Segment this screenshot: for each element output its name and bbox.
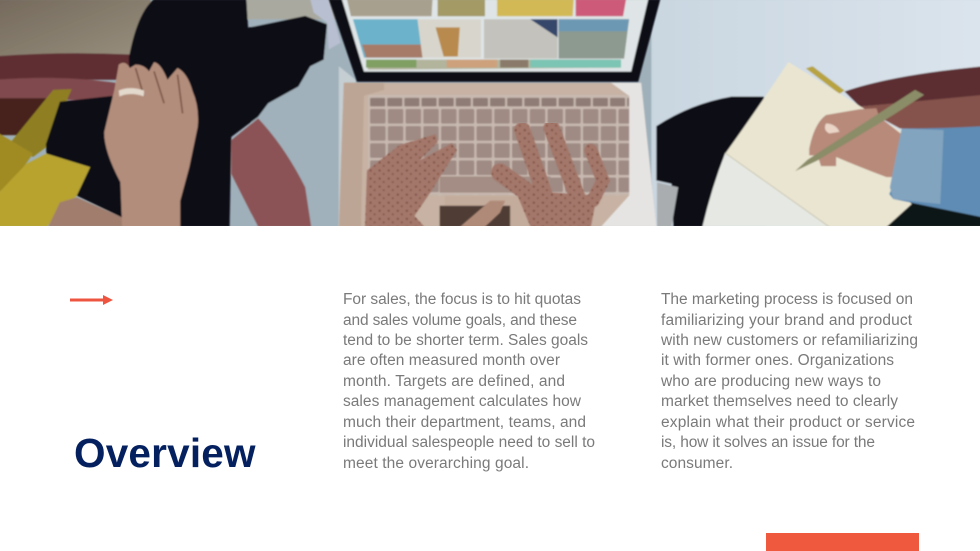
right typing hand	[500, 128, 603, 227]
text block: marketing process: market themselves need to clearly	[661, 393, 898, 410]
photo contents, nudged so soft edges fall outside the frame	[0, 0, 980, 228]
text block: sales goals: For sales, the focus is to hit quotas	[343, 291, 581, 308]
black knee	[656, 97, 766, 227]
text block: marketing process: familiarizing your brand and product	[661, 312, 913, 329]
yellow sweater	[10, 89, 72, 157]
pen	[795, 90, 924, 171]
text block: sales goals: meet the overarching goal.	[343, 455, 529, 472]
text block: marketing process: explain what their product or service	[661, 414, 915, 431]
title: Overview: Overview	[74, 430, 256, 476]
text block: marketing process	[661, 291, 918, 472]
black lap	[886, 194, 980, 227]
typing hands	[365, 128, 603, 227]
red armchair	[0, 53, 130, 80]
denim sleeve	[889, 126, 980, 217]
text block: sales goals	[343, 291, 595, 472]
left typing hand	[365, 134, 505, 227]
text block: sales goals: sales management calculates how	[343, 393, 582, 410]
text block: marketing process: is, how it solves an issue for the	[661, 434, 875, 451]
text block: marketing process: consumer.	[661, 455, 733, 472]
left part of the photo	[0, 0, 356, 228]
writing hand	[809, 108, 903, 177]
pink sleeve	[844, 66, 980, 107]
text block: marketing process: The marketing process is focused on	[661, 291, 913, 308]
text block: sales goals: month. Targets are defined, and	[343, 373, 565, 390]
orange accent block	[766, 533, 919, 551]
text block: sales goals: much their department, teams, and	[343, 414, 586, 431]
hand with ring	[104, 62, 198, 227]
screen gallery tiles	[347, 0, 629, 70]
text block: sales goals: individual salespeople need to sell to	[343, 434, 595, 451]
text block: marketing process: who are producing new ways to	[661, 373, 881, 390]
notebook	[702, 62, 912, 227]
arrow icon	[70, 295, 113, 305]
header photo: people working around a laptop	[0, 0, 980, 226]
laptop screen	[329, 0, 660, 82]
right part of the photo	[651, 0, 980, 227]
text block: sales goals: and sales volume goals, and these	[343, 312, 577, 329]
laptop	[329, 0, 660, 227]
text block: sales goals: tend to be shorter term. Sales goals	[343, 332, 588, 349]
text block: sales goals: are often measured month over	[343, 352, 560, 369]
text block: marketing process: it with former ones. Organizations	[661, 352, 894, 369]
laptop base	[339, 83, 656, 227]
text block: marketing process: with new customers or refamiliarizing	[661, 332, 918, 349]
black trousers	[129, 0, 327, 227]
sock	[310, 0, 340, 49]
